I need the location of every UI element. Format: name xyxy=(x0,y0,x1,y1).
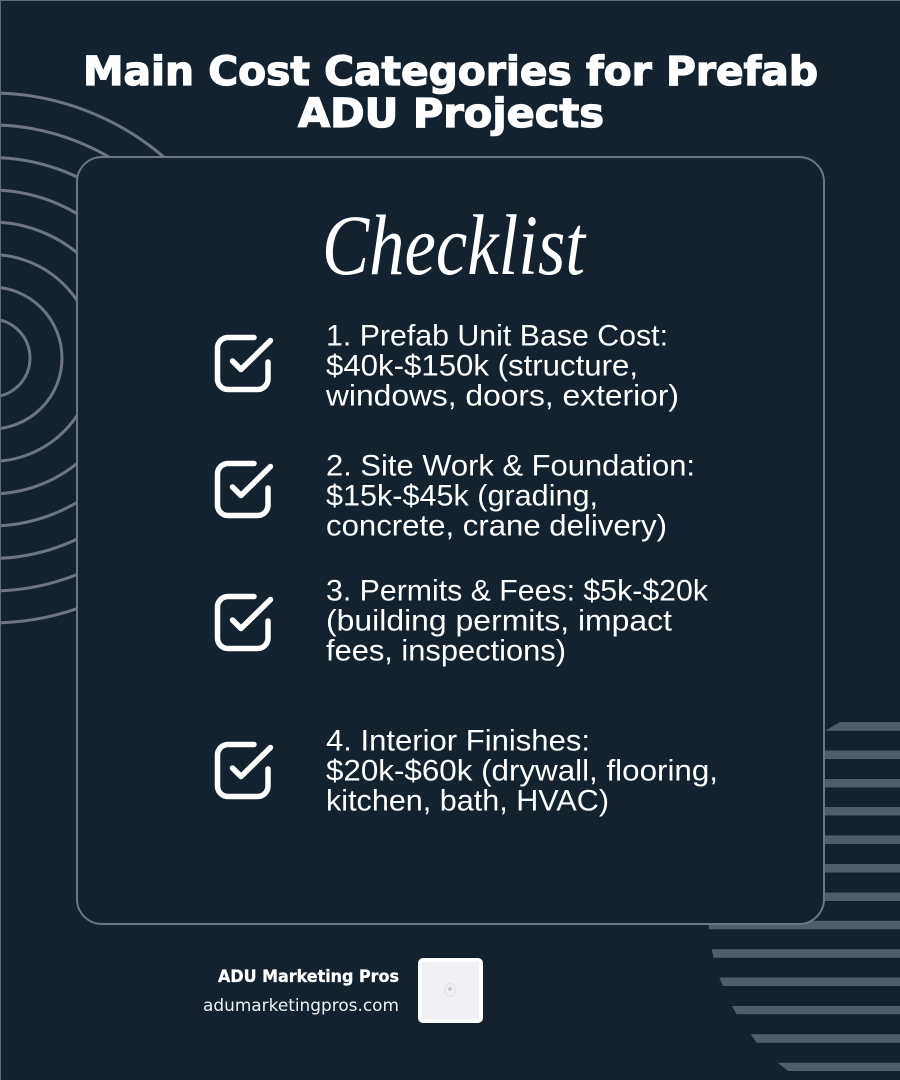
text: item 2 xyxy=(326,450,695,542)
checklist item 1 xyxy=(218,320,679,412)
title: Main Cost Categories for Prefab xyxy=(83,49,818,95)
text: item 2: 2. Site Work & Foundation: xyxy=(326,450,695,482)
text: item 4: 4. Interior Finishes: xyxy=(326,724,590,758)
text: item 4 xyxy=(326,724,718,818)
footer logo xyxy=(418,958,483,1023)
text: item 4: $20k-$60k (drywall, flooring, xyxy=(326,754,718,788)
checklist item 3 xyxy=(218,574,708,668)
text: item 3 xyxy=(326,574,708,668)
text: item 1 xyxy=(325,320,679,412)
text: item 1: windows, doors, exterior) xyxy=(325,380,679,412)
icon: checkbox 4 xyxy=(218,744,270,796)
decorative concentric circles xyxy=(0,93,256,623)
text: item 1: $40k-$150k (structure, xyxy=(326,350,638,382)
footer brand text xyxy=(203,967,399,1015)
text: item 4: kitchen, bath, HVAC) xyxy=(326,784,609,818)
checklist item 4 xyxy=(218,724,718,818)
footer brand text: ADU Marketing Pros xyxy=(218,967,399,986)
title xyxy=(83,49,818,137)
icon: checkbox 2 xyxy=(218,464,270,516)
text: item 3: fees, inspections) xyxy=(326,634,566,668)
footer brand text: adumarketingpros.com xyxy=(203,996,399,1015)
checklist item 2 xyxy=(218,450,695,542)
icon: checkbox 3 xyxy=(218,596,270,648)
title: ADU Projects xyxy=(298,91,604,137)
text: item 2: $15k-$45k (grading, xyxy=(326,480,598,512)
heading: Checklist: Checklist xyxy=(322,197,587,293)
panel: checklist xyxy=(77,157,824,924)
text: item 3: (building permits, impact xyxy=(326,604,672,638)
text: item 1: 1. Prefab Unit Base Cost: xyxy=(326,320,668,352)
icon: checkbox 1 xyxy=(218,338,270,390)
decorative striped circle xyxy=(708,722,900,1071)
text: item 3: 3. Permits & Fees: $5k-$20k xyxy=(326,574,708,608)
text: item 2: concrete, crane delivery) xyxy=(326,510,667,542)
